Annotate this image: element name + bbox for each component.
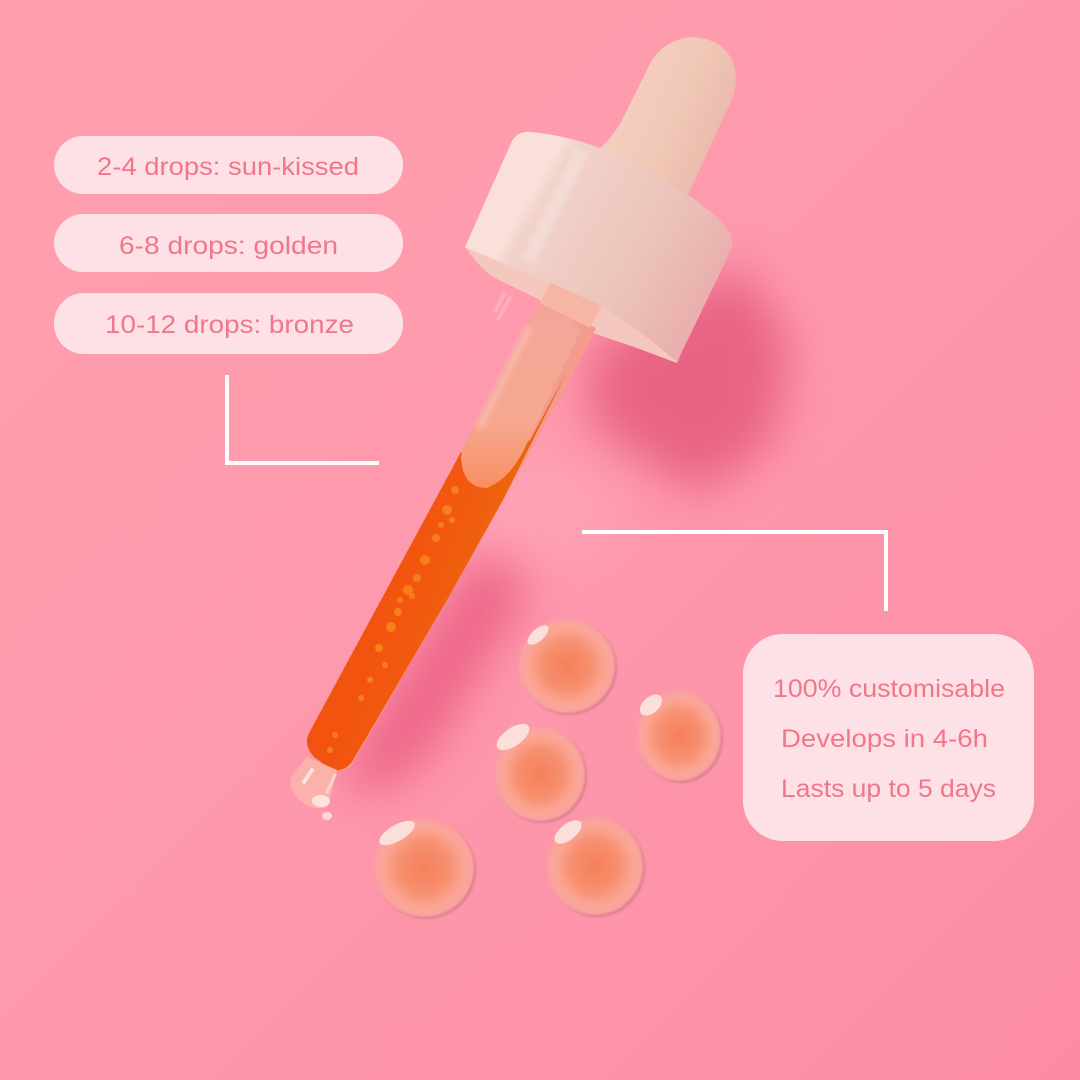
- pill: 2-4 drops: 2-4 drops: sun-kissed: [97, 153, 359, 181]
- drop 1: [519, 619, 617, 715]
- inner pipette: [461, 303, 581, 488]
- oil drops: [374, 619, 723, 919]
- glass tube: [307, 303, 596, 772]
- bracket line: right: [582, 532, 886, 611]
- benefits panel: Develops in 4-6h: [781, 725, 988, 753]
- drop 3: [492, 719, 587, 823]
- pill: 2-4 drops: [54, 136, 403, 194]
- orange oil in tube: [307, 372, 567, 770]
- pill: 10-12 drops: [54, 293, 403, 354]
- drop 5: [547, 816, 645, 917]
- drop 4: [374, 816, 476, 919]
- faint wisps: [495, 292, 511, 320]
- pill: 6-8 drops: [54, 214, 403, 272]
- pill: 10-12 drops: 10-12 drops: bronze: [105, 311, 354, 339]
- dropper: [290, 278, 602, 820]
- benefits panel: [743, 634, 1034, 841]
- rubber bulb: [598, 37, 736, 197]
- bracket line: left: [227, 375, 379, 463]
- drop 2: [636, 690, 723, 783]
- dropper cap: [465, 132, 732, 362]
- oil bubbles: [327, 486, 459, 753]
- cap opening (inside of cap): [465, 225, 690, 363]
- pill: 6-8 drops: 6-8 drops: golden: [119, 232, 338, 260]
- benefits panel: 100% customisable: [773, 675, 1005, 703]
- neck collar: [540, 278, 602, 328]
- dropper tip: [290, 757, 337, 820]
- benefits panel: Lasts up to 5 days: [781, 775, 996, 803]
